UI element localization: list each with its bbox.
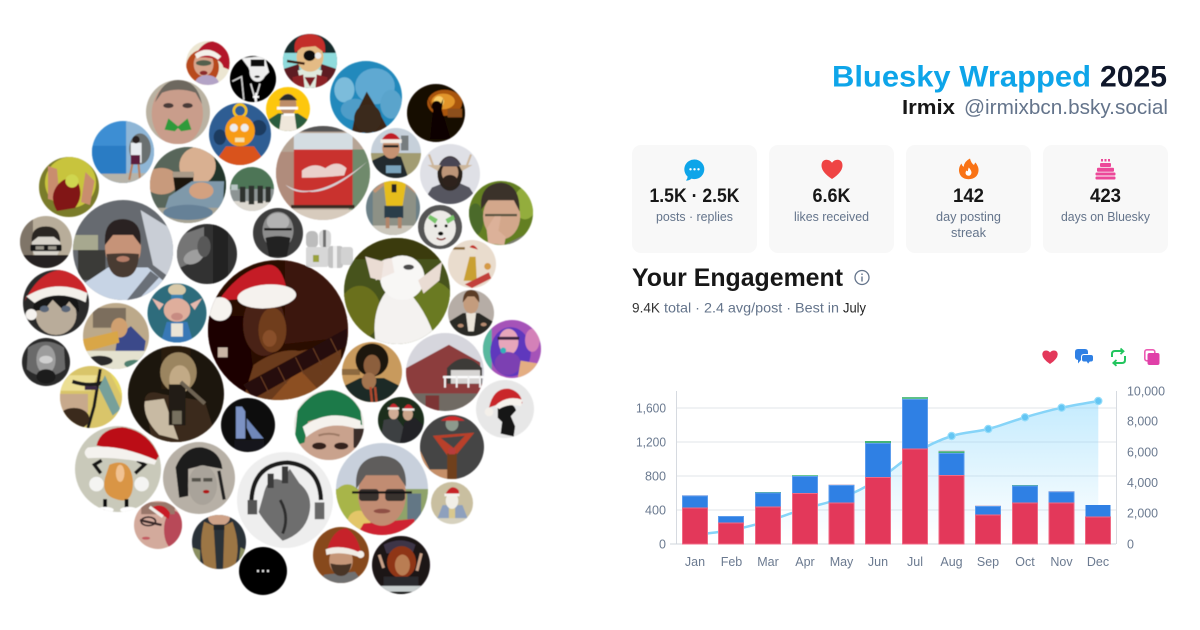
avatar: radio DJ bbox=[83, 303, 149, 371]
cumulative area bbox=[695, 401, 1098, 544]
right axis labels: 10,000 bbox=[1127, 384, 1165, 398]
left axis labels: 800 bbox=[645, 470, 666, 484]
avatar: car selfie bbox=[73, 200, 173, 300]
month labels: May bbox=[830, 555, 854, 569]
grid lines bbox=[670, 391, 1116, 544]
avatar: white goat bbox=[339, 238, 455, 344]
avatar: santa woman close-up bbox=[134, 501, 183, 549]
avatar: red covered bridge bbox=[406, 333, 486, 413]
avatar: mono hair bbox=[22, 338, 70, 386]
month labels: Aug bbox=[940, 555, 963, 569]
avatar: long hair woman bbox=[192, 510, 246, 569]
stat card: streak bbox=[906, 145, 1031, 253]
legend icon: likes bbox=[1042, 350, 1058, 364]
stat card: days on Bluesky: 423 bbox=[1090, 186, 1121, 207]
avatar: santa hat man outdoors bbox=[371, 128, 421, 178]
combo chart bbox=[636, 384, 1165, 569]
user name and handle: @irmixbcn.bsky.social bbox=[964, 96, 1168, 119]
avatar: jimi hendrix style bbox=[342, 342, 402, 402]
title: 2025 bbox=[1100, 60, 1167, 94]
month labels: Jan bbox=[685, 555, 705, 569]
avatar: white dog bbox=[418, 205, 462, 249]
right axis labels: 8,000 bbox=[1127, 414, 1158, 428]
avatar: two santas bbox=[378, 397, 424, 443]
avatar: silhouette with santa hat bbox=[476, 380, 534, 438]
avatar: sketched woman bbox=[163, 442, 235, 514]
avatar: yellow portrait bbox=[266, 87, 310, 131]
user name and handle: Irmix bbox=[902, 96, 956, 119]
avatar: baby with mug bbox=[144, 147, 226, 227]
avatar: steel thermos cups bbox=[306, 230, 353, 268]
month labels: Jul bbox=[907, 555, 923, 569]
avatar: man with green moustache bbox=[146, 80, 210, 146]
month labels: Dec bbox=[1087, 555, 1109, 569]
icon: heart bbox=[822, 160, 842, 179]
avatar: antlers hat bbox=[420, 144, 480, 204]
icon: chat bubble bbox=[684, 159, 704, 181]
icon: info bbox=[855, 270, 869, 284]
legend icon: quotes bbox=[1145, 350, 1160, 365]
month labels: Mar bbox=[757, 555, 779, 569]
right axis labels: 0 bbox=[1127, 538, 1134, 552]
avatar: blue sky with tree bbox=[330, 61, 402, 133]
avatar: Y shirt and bottle bbox=[420, 415, 484, 479]
stat card: likes bbox=[769, 145, 894, 253]
avatar: young man with vest bbox=[448, 290, 494, 336]
avatar: goth illustration bbox=[230, 56, 276, 102]
right axis labels bbox=[1127, 384, 1165, 552]
avatar: fire silhouette bbox=[407, 84, 465, 142]
engagement summary: 9.4K bbox=[632, 300, 661, 316]
avatar: bA logo bbox=[221, 398, 275, 452]
avatar: witch bbox=[372, 536, 430, 597]
avatar cluster bbox=[20, 34, 541, 597]
icon: birthday cake bbox=[1096, 159, 1116, 180]
icon: flame bbox=[959, 158, 979, 179]
right axis labels: 6,000 bbox=[1127, 446, 1158, 460]
cumulative line bbox=[695, 397, 1102, 535]
left axis labels: 1,200 bbox=[636, 436, 666, 450]
left axis labels bbox=[636, 402, 666, 552]
avatar: bearded man in santa hat bbox=[313, 527, 369, 583]
avatar: more indicator: ··· bbox=[255, 560, 271, 580]
legend icon: reposts bbox=[1112, 348, 1125, 366]
avatar: medieval figures bbox=[448, 240, 496, 288]
stat card: days on Bluesky: days on Bluesky bbox=[1061, 210, 1151, 224]
month labels: Sep bbox=[977, 555, 999, 569]
engagement summary: July bbox=[843, 300, 866, 316]
avatar: red haired pirate bbox=[283, 34, 337, 88]
right axis labels: 4,000 bbox=[1127, 476, 1158, 490]
avatar: photographer bbox=[128, 346, 224, 442]
engagement summary: total · 2.4 avg/post · Best in bbox=[664, 300, 839, 316]
avatar: orange character badge bbox=[209, 103, 271, 165]
avatar: chef pig bbox=[148, 284, 206, 342]
avatar: man rubbing eye bbox=[467, 181, 536, 245]
right axis labels: 2,000 bbox=[1127, 506, 1158, 520]
title: Bluesky Wrapped bbox=[832, 60, 1091, 94]
avatar: blue wall bbox=[92, 121, 154, 185]
month labels: Feb bbox=[721, 555, 742, 569]
chart legend bbox=[1042, 348, 1160, 366]
stat card: posts and replies bbox=[632, 145, 757, 253]
avatar: elevator mirror selfie bbox=[366, 181, 420, 236]
avatar: man in glasses and red shirt bbox=[331, 443, 428, 535]
left axis labels: 400 bbox=[645, 504, 666, 518]
month labels: Apr bbox=[795, 555, 815, 569]
legend icon: replies bbox=[1075, 349, 1094, 364]
month labels: Oct bbox=[1015, 555, 1035, 569]
left axis labels: 0 bbox=[659, 538, 666, 552]
stacked bars bbox=[682, 397, 1110, 544]
stat card: likes: 6.6K bbox=[812, 186, 851, 207]
stat card: streak: streak bbox=[951, 226, 987, 240]
avatar: stripe painting bbox=[58, 366, 122, 430]
heading: your engagement: Your Engagement bbox=[632, 264, 844, 292]
avatar: man in green santa hat bbox=[294, 390, 364, 478]
avatar: yellow creature bbox=[39, 157, 99, 217]
avatar: woman with santa hat and guitar bbox=[208, 260, 348, 404]
avatar: man with black glasses bbox=[20, 216, 72, 268]
stat card: streak: day posting bbox=[936, 210, 1001, 224]
avatar: abbey road bbox=[230, 167, 274, 212]
avatar: santa woman bbox=[186, 40, 230, 86]
stat card: days on Bluesky bbox=[1043, 145, 1168, 253]
month labels bbox=[685, 555, 1109, 569]
avatar: bearded engraving bbox=[253, 208, 303, 258]
avatar: peanut character in santa hat bbox=[75, 426, 161, 513]
month labels: Nov bbox=[1050, 555, 1073, 569]
avatar: purple selfie bbox=[483, 320, 541, 378]
avatar: anatomical heart headphones bbox=[237, 452, 333, 548]
month labels: Jun bbox=[868, 555, 888, 569]
stat card: likes: likes received bbox=[794, 210, 869, 224]
avatar: more indicator bbox=[239, 547, 287, 595]
avatar: small santa bbox=[431, 482, 473, 525]
stat card: posts and replies: posts · replies bbox=[656, 210, 733, 224]
avatar: dark mono figure bbox=[177, 224, 237, 284]
stat card: streak: 142 bbox=[953, 186, 984, 207]
avatar: anime santa bbox=[23, 270, 89, 336]
stat card: posts and replies: 1.5K · 2.5K bbox=[650, 186, 740, 207]
avatar: coca-cola sign bbox=[276, 126, 372, 224]
left axis labels: 1,600 bbox=[636, 402, 666, 416]
